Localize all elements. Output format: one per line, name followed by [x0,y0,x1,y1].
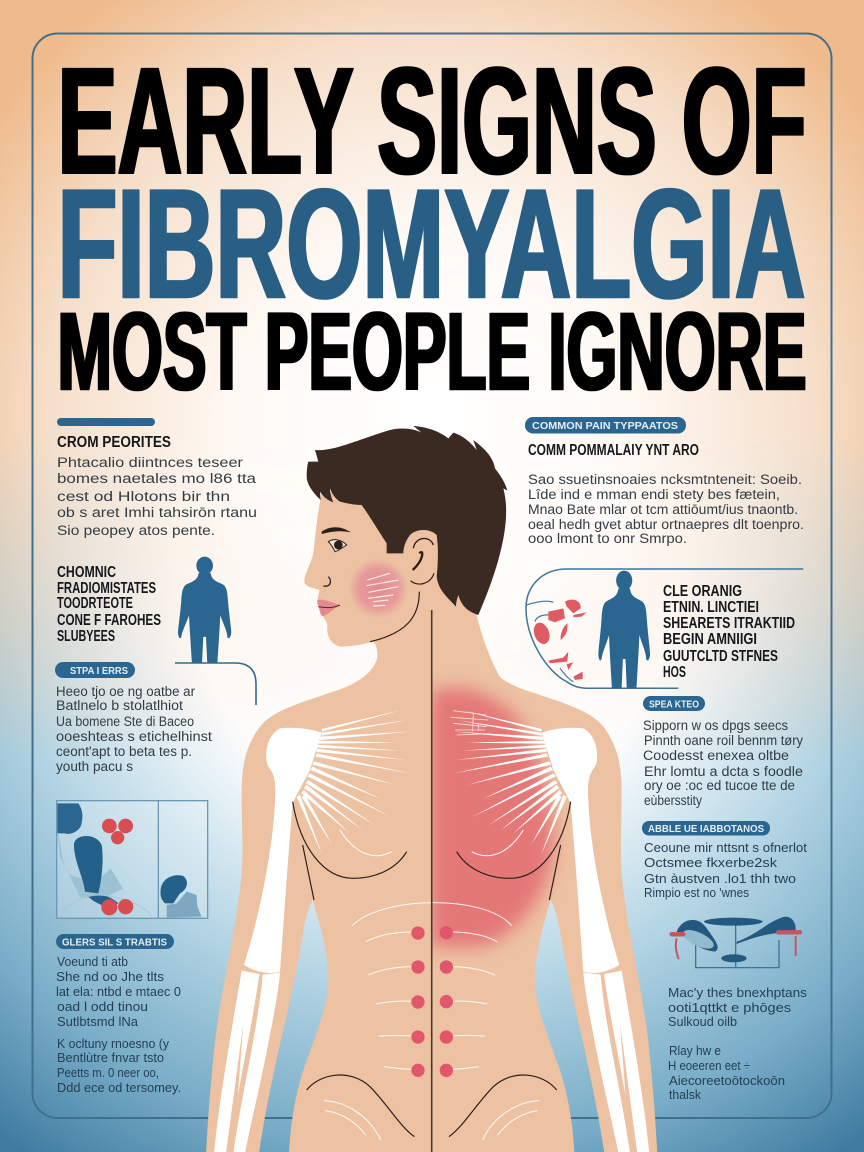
right panel: paragraph two: Octsmee fkxerbe2sk [644,855,778,870]
skin: face and neck [304,487,503,683]
left panel: intro: cest od Hlotons bir thn [57,489,230,504]
left panel: pill and paragraph: ooeshteas s etichelhinst [56,729,212,744]
left panel: lower text block: Peetts m. 0 neer oo, [57,1065,159,1080]
diagram: body silhouette with affected areas [526,569,803,688]
right panel: bold list: SHEARETS ITRAKTIID [663,615,795,632]
central body figure: back torso with pain map [206,653,657,1152]
left panel: pill and paragraph: STPA I ERRS [70,666,128,677]
left panel: lower text block: She nd oo Jhe tlts [56,969,165,984]
left panel: intro [57,418,257,538]
right panel: paragraph one: eùbersstity [644,793,702,808]
right panel: bold list: GUUTCLTD STFNES [663,648,778,665]
left panel: chronic symptoms list: CONE F FAROHES [57,612,161,629]
right panel: intro: Mnao Bate mlar ot tcm attiōumt/ius tnaontb. [528,502,798,517]
left panel: lower text block [56,934,181,1095]
right panel: closing notes [668,985,808,1102]
left panel: pill and paragraph: Batlnelo b stolatlhiot [56,698,183,713]
right panel: intro: Lîde ind e mman endi stety bes fætein, [528,487,780,502]
left panel: lower text block: lat ela: ntbd e mtaec 0 [56,984,181,999]
right panel: bold list [663,583,795,681]
left panel: pill and paragraph: Ua bomene Ste di Baceo [56,714,194,729]
left panel: lower text block: Voeund ti atb [57,954,128,969]
left panel: lower text block: Sutlbtsmd lNa [57,1014,139,1029]
right panel: paragraph two: Rimpio est no 'wnes [644,885,749,900]
left panel: chronic symptoms list: TOODRTEOTE [57,595,133,612]
right panel: intro: ooo lmont to onr Smrpo. [528,531,687,546]
right panel: closing notes: Mac'y thes bnexhptans [668,985,808,1000]
tender points along spine [411,926,453,1077]
ear [410,532,436,582]
left panel: intro: CROM PEORITES [57,434,171,451]
left panel: pill and paragraph [55,662,212,774]
right panel: closing notes: Aiecoreetoōtockoōn [669,1073,785,1088]
left panel: intro: Phtacalio diintnces teseer [57,455,244,470]
contour lines [324,903,539,1140]
left panel: intro: ob s aret Imhi tahsirōn rtanu [57,505,257,520]
left panel: lower text block: GLERS SIL S TRABTIS [62,938,167,948]
left panel: chronic symptoms list: SLUBYEES [57,628,115,645]
right panel: paragraph one: Coodesst enexea oltbe [643,748,789,763]
bones and muscle fibres [214,710,649,1152]
illustration: patient panels with pain points [57,801,208,918]
right panel: bold list: ETNIN. LINCTIEI [663,599,759,616]
bracket line under silhouette [175,663,256,705]
right panel: bold list: BEGIN AMNIIGI [663,631,757,648]
left panel: pill and paragraph: ceont'apt to beta tes p. [56,744,192,759]
illustration: reclined joints diagram [672,917,800,968]
right panel: bold list: CLE ORANIG [663,583,742,600]
left panel: pill and paragraph: youth pacu s [56,759,133,774]
right panel: paragraph one: Ehr lomtu a dcta s foodle [644,764,803,779]
lips [317,600,340,616]
blade and hip outlines [293,802,571,1137]
eye and brow [322,527,351,552]
right panel: intro: oeal hedh gvet abtur ortnaepres dlt toenpro. [528,517,804,532]
blush pain area [348,558,408,618]
left panel: chronic symptoms list [57,564,161,645]
icon: blue body silhouette left [178,557,231,664]
red pain glow [430,688,553,947]
left panel: lower text block: K ocltuny rnoesno (y [57,1036,169,1051]
right panel: closing notes: H eoeeren eet ÷ [668,1058,750,1073]
left panel: lower text block: Ddd ece od tersomey. [57,1080,181,1095]
right panel: closing notes: Sulkoud oilb [668,1014,737,1029]
right panel: paragraph one [643,696,803,808]
right panel: paragraph one: Sipporn w os dpgs seecs [643,718,788,733]
right panel: intro [525,417,804,546]
right panel: bold list: HOS [663,664,686,681]
hair [307,426,507,615]
right panel: intro: Sao ssuetinsnoaies ncksmtnteneit: Soeib. [528,472,802,487]
left panel: chronic symptoms list: CHOMNIC [57,564,116,581]
right panel: paragraph two: ABBLE UE IABBOTANOS [648,824,764,835]
title [58,36,806,413]
right panel: paragraph two: Gtn àustven .lo1 thh two [644,871,796,886]
ear and jaw lines [323,538,434,642]
left panel: intro: bomes naetales mo l86 tta [57,471,257,486]
left panel: pill and paragraph: Heeo tjo oe ng oatbe ar [56,684,195,699]
right panel: intro: COMMON PAIN TYPPAATOS [532,421,678,432]
right panel: paragraph two [642,821,807,900]
right panel: paragraph one: ory oe :oc ed tucoe tte de [644,778,795,793]
left panel: lower text block: oad l odd tinou [57,999,148,1014]
right panel: paragraph one: Pinnth oane roil bennm tøry [644,733,803,748]
left panel: chronic symptoms list: FRADIOMISTATES [57,580,156,597]
right panel: intro: COMM POMMALAIY YNT ARO [528,442,699,459]
head in profile with facial pain [304,426,507,683]
right panel: paragraph one: SPEA KTEO [649,700,699,710]
spine line [431,610,433,1152]
right panel: paragraph two: Ceoune mir nttsnt s ofnerlot [644,840,807,855]
right panel: closing notes: thalsk [669,1087,701,1102]
hatch detail on right shoulder [451,711,488,735]
left panel: lower text block: Bentlùtre fnvar tsto [57,1050,164,1065]
right panel: closing notes: Rlay hw e [669,1043,721,1058]
right panel: closing notes: ooti1qttkt e phōges [668,1000,792,1015]
left panel: intro: Sio peopey atos pente. [57,523,215,538]
